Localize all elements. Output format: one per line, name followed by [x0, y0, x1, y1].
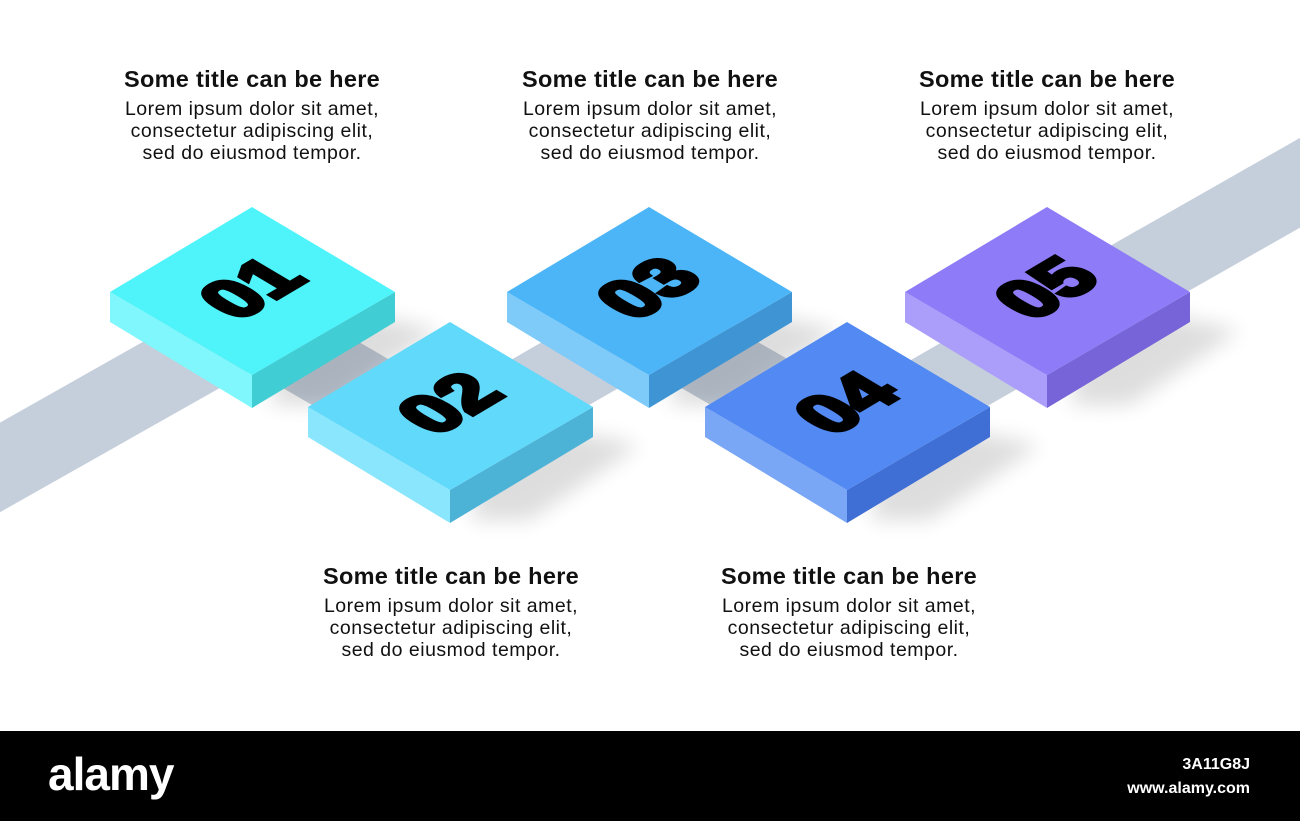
- text block 2: consectetur adipiscing elit,: [330, 617, 572, 639]
- text block 5: consectetur adipiscing elit,: [926, 120, 1168, 142]
- tile 02: 02: [378, 361, 520, 445]
- tile 05: 05: [975, 246, 1117, 330]
- text block 3: Some title can be here: [522, 66, 778, 92]
- tile 03: 03: [577, 246, 719, 330]
- tile 03: [507, 207, 792, 408]
- text block 1: [124, 66, 380, 164]
- text block 2: Some title can be here: [323, 563, 579, 589]
- tile 02: [308, 322, 593, 523]
- text block 4: Lorem ipsum dolor sit amet,: [722, 595, 976, 617]
- shadows: [270, 300, 1240, 520]
- text block 4: [721, 563, 977, 661]
- text block 4: consectetur adipiscing elit,: [728, 617, 970, 639]
- tile 01: [110, 207, 395, 408]
- path band: [0, 160, 1300, 490]
- footer ids: www.alamy.com: [1127, 780, 1250, 797]
- text block 5: Lorem ipsum dolor sit amet,: [920, 98, 1174, 120]
- text block 1: sed do eiusmod tempor.: [142, 142, 362, 164]
- text block 4: Some title can be here: [721, 563, 977, 589]
- text block 3: consectetur adipiscing elit,: [529, 120, 771, 142]
- text block 1: consectetur adipiscing elit,: [131, 120, 373, 142]
- tile 05: [905, 207, 1190, 408]
- text block 5: [919, 66, 1175, 164]
- text block 3: Lorem ipsum dolor sit amet,: [523, 98, 777, 120]
- footer logo: alamy: [48, 748, 173, 800]
- text block 2: Lorem ipsum dolor sit amet,: [324, 595, 578, 617]
- tile 04: [705, 322, 990, 523]
- tile 01: 01: [180, 246, 322, 330]
- footer ids: [1127, 756, 1250, 797]
- footer ids: 3A11G8J: [1182, 756, 1250, 773]
- text block 3: sed do eiusmod tempor.: [540, 142, 760, 164]
- text block 5: sed do eiusmod tempor.: [937, 142, 1157, 164]
- text block 1: Some title can be here: [124, 66, 380, 92]
- text block 3: [522, 66, 778, 164]
- text block 5: Some title can be here: [919, 66, 1175, 92]
- text block 4: sed do eiusmod tempor.: [739, 639, 959, 661]
- text block 2: [323, 563, 579, 661]
- tile 04: 04: [775, 361, 917, 445]
- text block 1: Lorem ipsum dolor sit amet,: [125, 98, 379, 120]
- footer bar: [0, 731, 1300, 821]
- text block 2: sed do eiusmod tempor.: [341, 639, 561, 661]
